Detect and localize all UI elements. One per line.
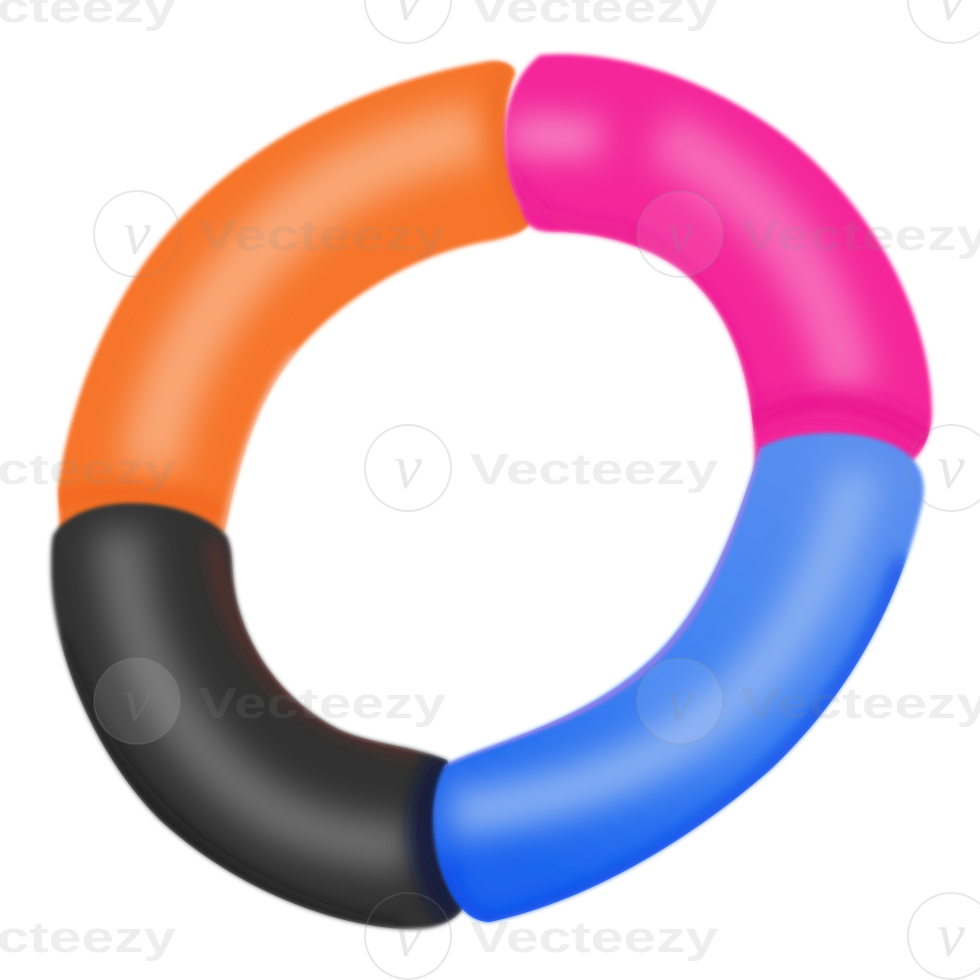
watermark logos: v <box>666 200 694 268</box>
watermark logos: v <box>123 200 151 268</box>
watermark text: Vecteezy <box>741 679 980 728</box>
watermark logos: v <box>666 667 694 735</box>
watermark logos: v <box>937 434 965 502</box>
watermark text: Vecteezy <box>198 679 447 728</box>
watermark logos: v <box>394 902 422 970</box>
watermark logos: v <box>394 434 422 502</box>
orange segment <box>40 60 531 532</box>
watermark logos: v <box>937 902 965 970</box>
pink segment <box>504 54 935 480</box>
black segment <box>51 503 480 935</box>
blue segment <box>433 433 924 922</box>
watermark text: Vecteezy <box>198 211 447 260</box>
watermark text: Vecteezy <box>470 913 719 962</box>
watermark text: Vecteezy <box>741 211 980 260</box>
watermark text: Vecteezy <box>470 445 719 494</box>
watermark logos: v <box>123 667 151 735</box>
